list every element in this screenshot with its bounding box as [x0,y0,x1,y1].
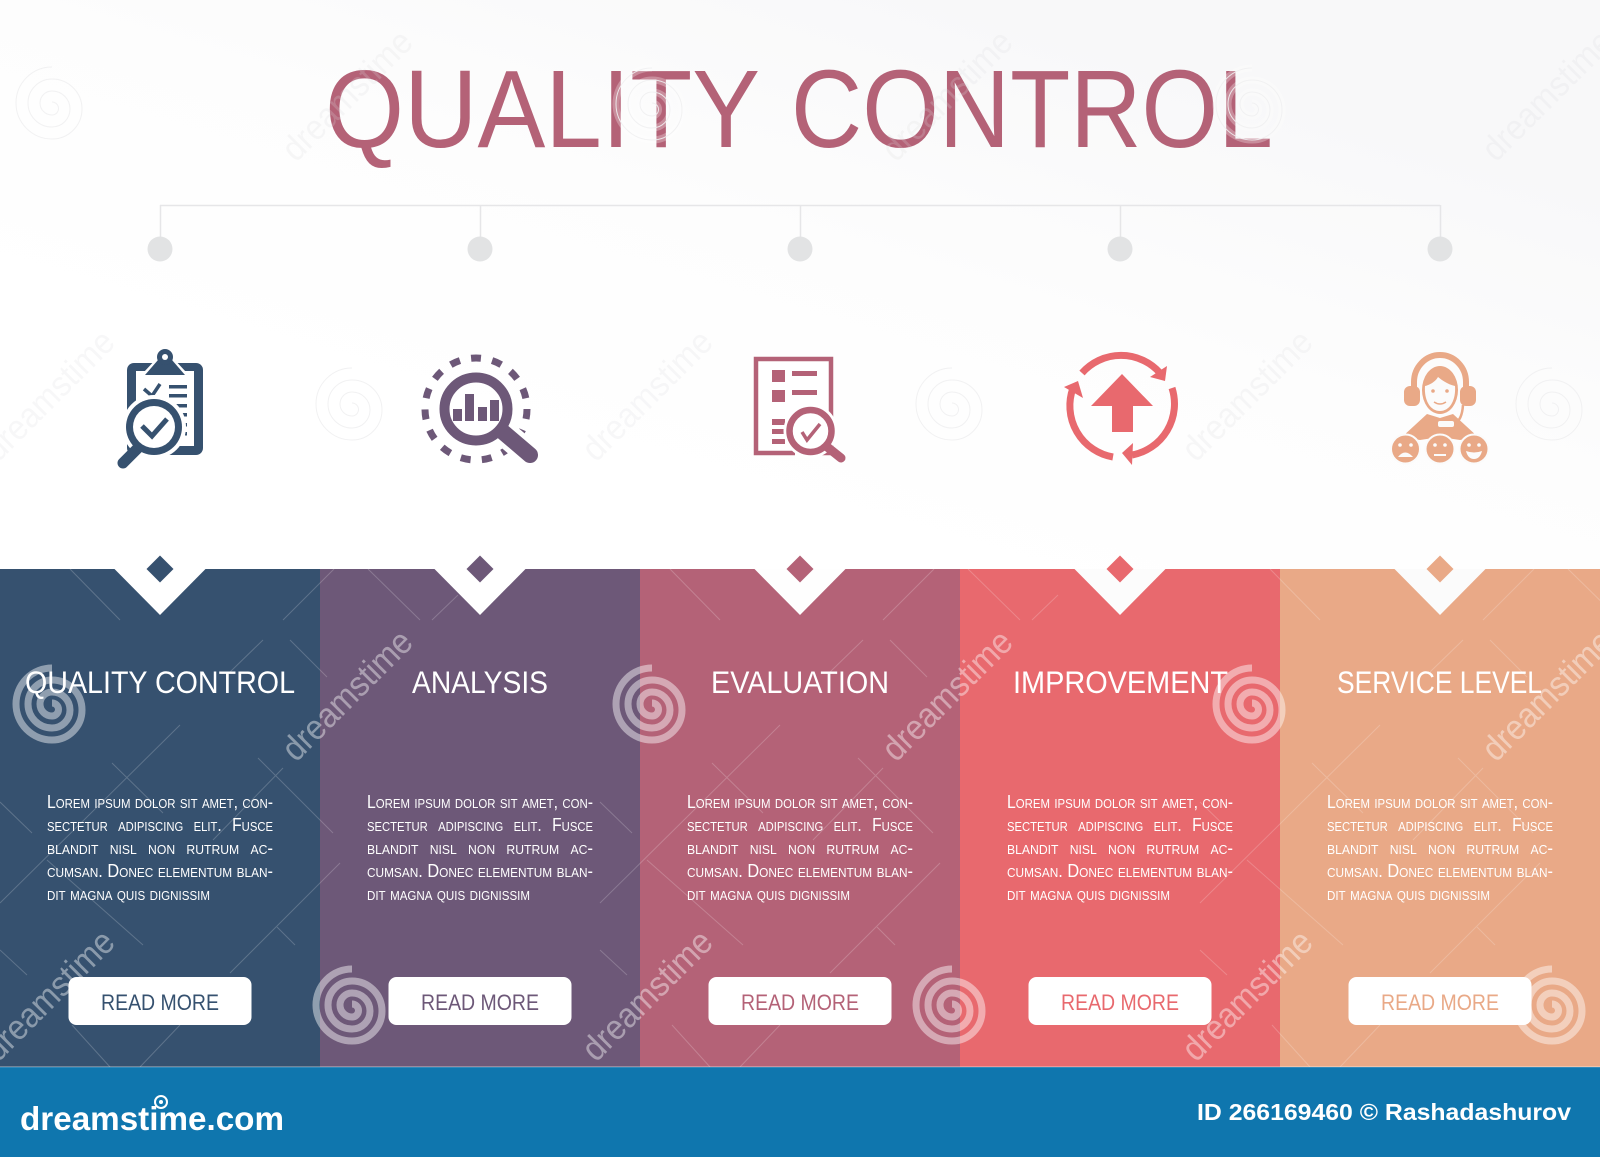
body text: sectetur adipiscing elit. Fusce [367,815,593,835]
body text: sectetur adipiscing elit. Fusce [1327,815,1553,835]
body text [687,792,913,904]
panel: service level [1280,556,1600,1067]
body text: cumsan. Donec elementum blan- [687,861,913,881]
body text: dit magna quis dignissim [687,884,850,904]
body text [47,792,273,904]
watermark overlay: dreamstime [1174,322,1320,469]
title: CONTROL [791,48,1273,171]
read more button: READ MORE [741,990,859,1015]
read more button [1348,977,1532,1025]
body text: sectetur adipiscing elit. Fusce [1007,815,1233,835]
watermark overlay: dreamstime [574,322,720,469]
body text: dit magna quis dignissim [1007,884,1170,904]
body text [367,792,593,904]
body text: blandit nisl non rutrum ac- [687,838,913,858]
body text: sectetur adipiscing elit. Fusce [687,815,913,835]
body text: Lorem ipsum dolor sit amet, con- [367,792,593,812]
body text: Lorem ipsum dolor sit amet, con- [1007,792,1233,812]
connector tree with five nodes [148,205,1452,262]
body text: Lorem ipsum dolor sit amet, con- [687,792,913,812]
heading: EVALUATION [711,664,889,700]
body text: blandit nisl non rutrum ac- [1007,838,1233,858]
heading: IMPROVEMENT [1013,664,1228,700]
read more button: READ MORE [1381,990,1499,1015]
read more button: READ MORE [421,990,539,1015]
body text: sectetur adipiscing elit. Fusce [47,815,273,835]
panel: analysis [320,556,640,1067]
footer logo: dreamstime.com [20,1100,284,1137]
body text: cumsan. Donec elementum blan- [367,861,593,881]
title: QUALITY [325,48,760,171]
read more button: READ MORE [101,990,219,1015]
read more button [68,977,252,1025]
body text: Lorem ipsum dolor sit amet, con- [47,792,273,812]
body text: Lorem ipsum dolor sit amet, con- [1327,792,1553,812]
watermark overlay: dreamstime [274,22,420,169]
watermark overlay: dreamstime [874,22,1020,169]
body text: blandit nisl non rutrum ac- [367,838,593,858]
body text: dit magna quis dignissim [367,884,530,904]
body text: cumsan. Donec elementum blan- [1327,861,1553,881]
notch with diamond [754,556,846,615]
icon: circular arrows around an up arrow [1064,355,1174,465]
body text: blandit nisl non rutrum ac- [1327,838,1553,858]
read more button: READ MORE [1061,990,1179,1015]
body text: cumsan. Donec elementum blan- [1007,861,1233,881]
notch with diamond [114,556,206,615]
body text: dit magna quis dignissim [47,884,210,904]
watermark overlay: dreamstime [1174,922,1320,1069]
title [325,48,1273,171]
background [0,0,1600,569]
heading: QUALITY CONTROL [25,664,295,700]
read more button [1028,977,1212,1025]
heading: SERVICE LEVEL [1337,664,1542,700]
notch with diamond [1074,556,1166,615]
icon: support agent with headset and three smileys [1391,355,1488,464]
watermark overlay: dreamstime [274,622,420,769]
body text: blandit nisl non rutrum ac- [47,838,273,858]
panel: quality control [0,556,320,1067]
body text: cumsan. Donec elementum blan- [47,861,273,881]
body text [1007,792,1233,904]
read more button [388,977,572,1025]
icon: clipboard with magnifier and check [122,349,203,463]
footer bar [0,1066,1600,1157]
watermark overlay: dreamstime [874,622,1020,769]
body text [1327,792,1553,904]
watermark overlay: dreamstime [574,922,720,1069]
icon: magnifier over bar chart with dashed ring [425,358,530,460]
heading: ANALYSIS [412,664,548,700]
notch with diamond [434,556,526,615]
panel: evaluation [640,556,960,1067]
read more button [708,977,892,1025]
body text: dit magna quis dignissim [1327,884,1490,904]
panel: improvement [960,556,1280,1067]
notch with diamond [1394,556,1486,615]
footer image id and credit: ID 266169460 © Rashadashurov [1197,1099,1571,1125]
icon: document with magnifier [756,359,841,458]
